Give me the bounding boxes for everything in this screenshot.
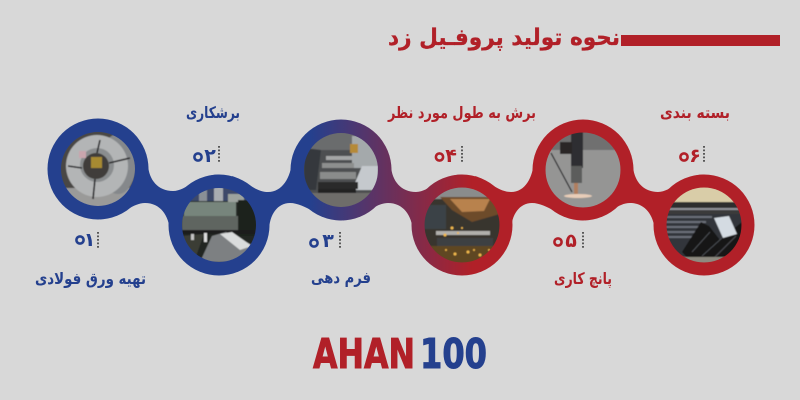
step 06 bbox=[660, 103, 730, 167]
photo: steel coil bbox=[60, 131, 136, 208]
photo: roll forming line bbox=[303, 132, 380, 208]
step 05 bbox=[552, 230, 612, 289]
step 03: ۰۳ bbox=[308, 230, 334, 252]
step 04: ۰۴ bbox=[434, 145, 457, 167]
photo: cutting machine bbox=[181, 187, 258, 263]
step 05: پانچ کاری bbox=[554, 269, 612, 289]
step 05: ۰۵ bbox=[552, 230, 577, 252]
logo: AHAN100: AHAN bbox=[313, 330, 415, 378]
step 04 bbox=[387, 103, 536, 167]
step 01 bbox=[35, 229, 146, 288]
step 02: برشکاری bbox=[186, 103, 240, 122]
step 06: ۰۶ bbox=[678, 145, 701, 167]
photo: punching tool bbox=[545, 132, 621, 208]
step 03: فرم دهی bbox=[311, 268, 371, 287]
step 01: تهیه ورق فولادی bbox=[35, 269, 146, 288]
step 02: ۰۲ bbox=[192, 145, 216, 167]
step 03 bbox=[308, 230, 371, 287]
step 02 bbox=[186, 103, 240, 167]
step 04: برش به طول مورد نظر bbox=[387, 103, 536, 122]
step 06: بسته بندی bbox=[660, 103, 730, 122]
step 01: ۰۱ bbox=[74, 229, 95, 251]
logo: AHAN100: 100 bbox=[420, 330, 487, 378]
process ribbon with six circular stations bbox=[48, 118, 754, 276]
title bbox=[388, 25, 780, 51]
photo: packaged profiles bbox=[666, 187, 742, 263]
title: نحوه تولید پروفـیل زد bbox=[388, 25, 620, 51]
photo: cutting to length with sparks bbox=[424, 187, 500, 263]
